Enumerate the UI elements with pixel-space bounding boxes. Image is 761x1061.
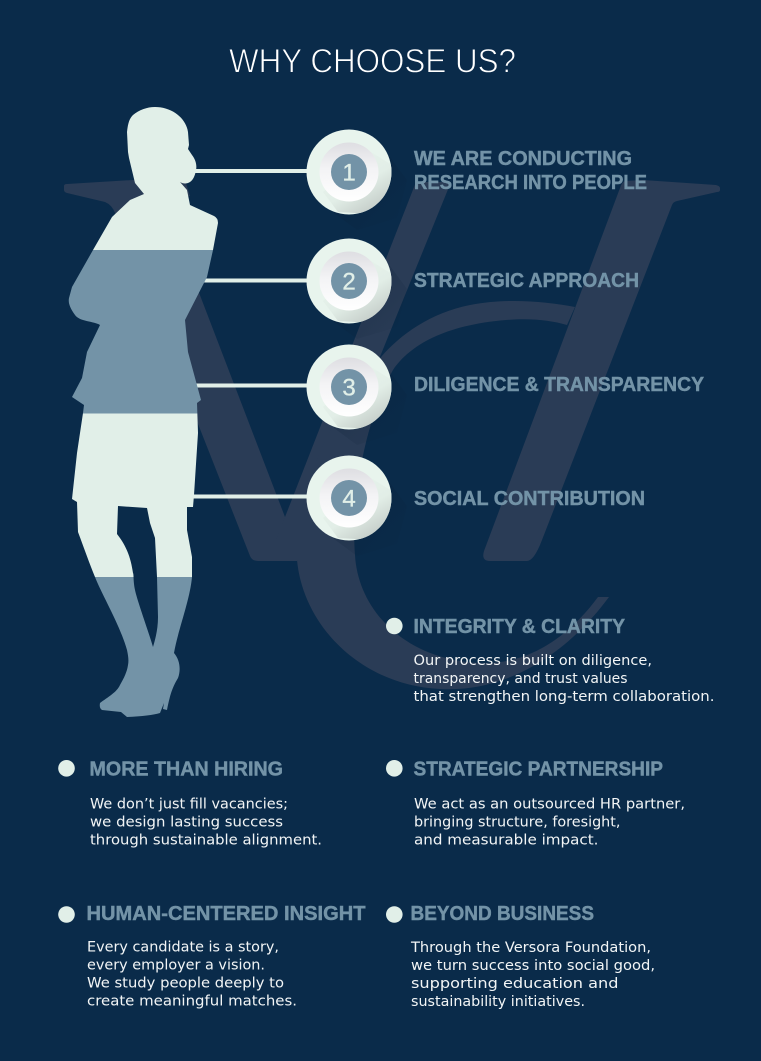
badge 2: 2: [342, 268, 356, 296]
text block: [90, 796, 322, 848]
badge 1: 1: [342, 160, 356, 186]
label 4: social contribution: SOCIAL CONTRIBUTION: [414, 488, 645, 510]
text block: and measurable impact.: [414, 832, 598, 848]
text block: Through the Versora Foundation,: [410, 940, 651, 956]
panel: human-centered insight: [58, 903, 365, 1010]
heading: INTEGRITY & CLARITY: [414, 616, 626, 638]
panel: integrity and clarity: [386, 616, 714, 705]
panel: more than hiring: [58, 759, 322, 848]
text block: every employer a vision.: [87, 958, 265, 974]
heading: HUMAN-CENTERED INSIGHT: [86, 903, 366, 925]
text block: We act as an outsourced HR partner,: [414, 796, 685, 812]
text block: we design lasting success: [90, 814, 283, 830]
text block: We study people deeply to: [87, 976, 284, 992]
text block: [87, 940, 297, 1010]
watermark monogram: [64, 180, 720, 689]
text block: We don’t just fill vacancies;: [90, 796, 288, 812]
badge 1: [306, 130, 392, 214]
text block: through sustainable alignment.: [90, 832, 322, 848]
label 3: diligence and transparency: DILIGENCE & TRANSPARENCY: [414, 374, 705, 396]
bullet: [58, 906, 75, 923]
panel: strategic partnership: [386, 759, 685, 848]
text block: we turn success into social good,: [411, 958, 655, 974]
text block: [410, 940, 655, 1010]
text block: Our process is built on diligence,: [414, 653, 652, 669]
heading: STRATEGIC PARTNERSHIP: [414, 759, 663, 781]
heading: BEYOND BUSINESS: [410, 903, 594, 925]
heading: MORE THAN HIRING: [90, 759, 283, 781]
bullet: [386, 760, 403, 777]
text block: create meaningful matches.: [87, 994, 297, 1010]
badge 2: [306, 238, 392, 324]
badge 3: 3: [342, 374, 356, 402]
badge 3: [306, 344, 392, 430]
panel: beyond business: [386, 903, 655, 1010]
text block: Every candidate is a story,: [87, 940, 279, 956]
text block: [414, 796, 685, 848]
connector lines: [188, 169, 312, 498]
label 1: research into people: WE ARE CONDUCTING: [414, 148, 632, 170]
text block: bringing structure, foresight,: [414, 814, 620, 830]
bullet: [386, 618, 403, 634]
silhouette of woman: [68, 107, 218, 717]
bullet: [58, 760, 75, 777]
badge 4: [306, 456, 392, 540]
title: WHY CHOOSE US?: [229, 42, 516, 80]
label 1: research into people: [414, 148, 647, 194]
label 2: strategic approach: STRATEGIC APPROACH: [414, 270, 639, 292]
text block: transparency, and trust values: [414, 671, 628, 687]
text block: sustainability initiatives.: [411, 994, 585, 1010]
label 1: research into people: RESEARCH INTO PEOPLE: [414, 172, 647, 194]
bullet: [386, 906, 403, 923]
badge 4: 4: [342, 486, 356, 512]
text block: [414, 653, 714, 705]
text block: that strengthen long-term collaboration.: [414, 689, 714, 705]
text block: supporting education and: [411, 976, 618, 992]
